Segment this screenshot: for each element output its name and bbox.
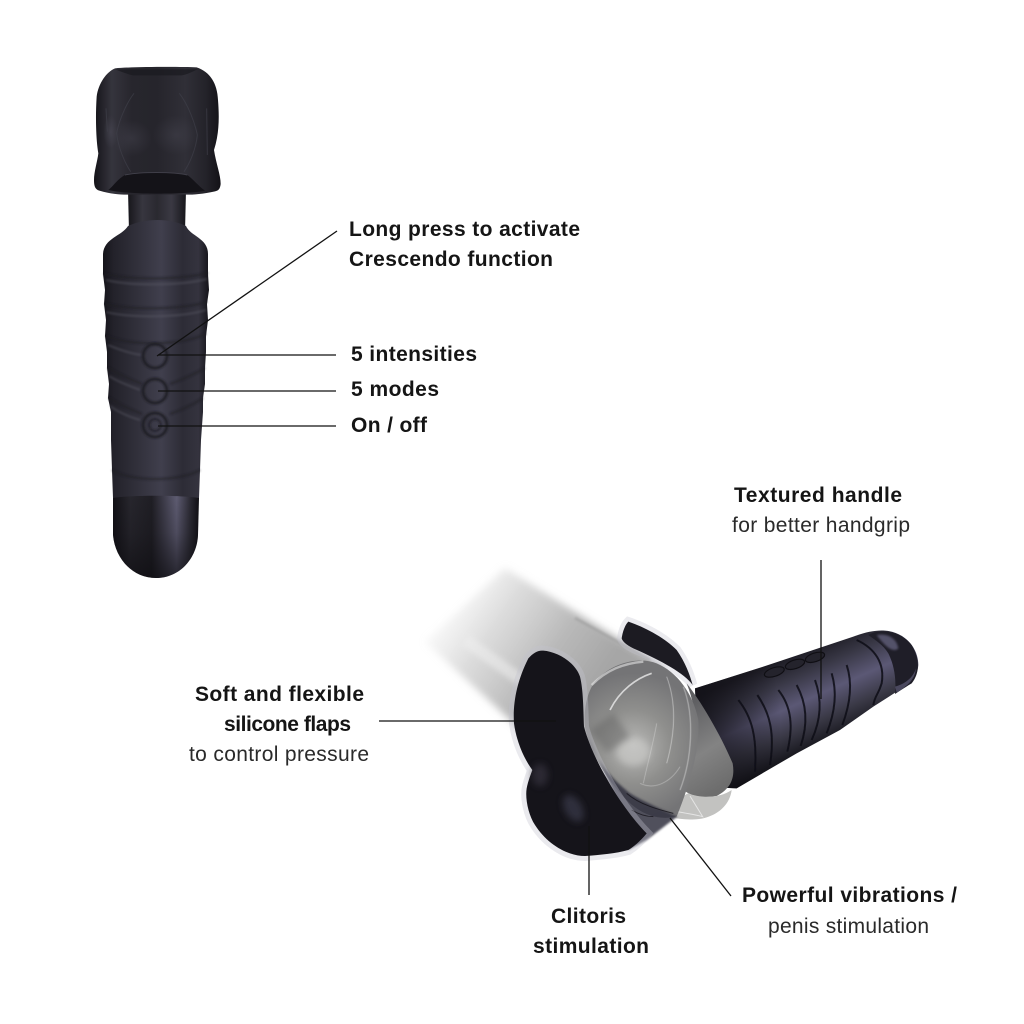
label: silicone flaps: to control pressure bbox=[189, 743, 369, 766]
label: powerful vibrations: penis stimulation bbox=[768, 915, 929, 938]
label: crescendo: Long press to activate bbox=[349, 218, 580, 241]
back silicone flap bbox=[622, 622, 693, 685]
label: textured handle: for better handgrip bbox=[732, 514, 910, 537]
modes button bbox=[143, 379, 167, 403]
label: silicone flaps: silicone flaps bbox=[224, 713, 351, 736]
label: textured handle: Textured handle bbox=[734, 484, 902, 507]
power button bbox=[143, 413, 167, 437]
wand handle body bbox=[103, 220, 209, 498]
label: modes: 5 modes bbox=[351, 378, 439, 401]
wand neck bbox=[128, 190, 186, 232]
wand base cap bbox=[113, 496, 199, 578]
wand head bbox=[94, 67, 221, 195]
leader lines: angled view bbox=[379, 560, 821, 896]
label: powerful vibrations bbox=[742, 884, 957, 938]
purple shadow of sleeve bbox=[587, 735, 677, 850]
label: crescendo: Crescendo function bbox=[349, 248, 553, 271]
grey sleeve lobe bbox=[683, 683, 733, 797]
sleeve detail bbox=[514, 622, 733, 856]
sleeve glass dome bbox=[585, 661, 699, 818]
transparent tube bbox=[425, 568, 665, 770]
sleeve lens bbox=[670, 790, 732, 820]
control buttons bbox=[143, 344, 167, 437]
handle buttons bbox=[763, 650, 826, 679]
label: crescendo bbox=[349, 218, 580, 271]
label: clitoris stimulation bbox=[533, 905, 649, 958]
label: on off: On / off bbox=[351, 414, 428, 437]
label: textured handle bbox=[732, 484, 910, 537]
front silicone flap bbox=[514, 651, 647, 856]
leader lines: wand controls bbox=[157, 231, 337, 426]
angled handle bbox=[695, 631, 918, 788]
label: clitoris stimulation: stimulation bbox=[533, 935, 649, 958]
product: upright wand bbox=[94, 67, 221, 578]
label: powerful vibrations: Powerful vibrations / bbox=[742, 884, 957, 907]
intensity button bbox=[143, 344, 167, 368]
handle cap bbox=[868, 631, 918, 694]
product: angled view with sleeve bbox=[425, 568, 918, 856]
label: silicone flaps bbox=[189, 683, 369, 766]
label: clitoris stimulation: Clitoris bbox=[551, 905, 626, 928]
label: intensities: 5 intensities bbox=[351, 343, 477, 366]
label: silicone flaps: Soft and flexible bbox=[195, 683, 364, 706]
